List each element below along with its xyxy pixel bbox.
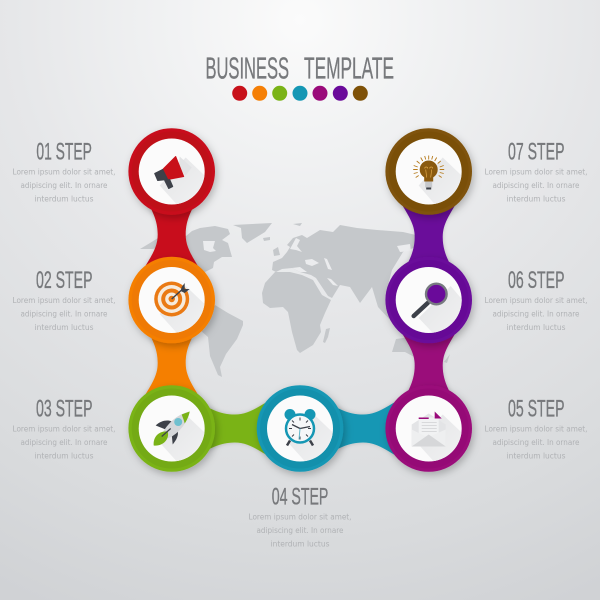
icon: target with arrow [154, 282, 190, 316]
text: 07 step: Lorem ipsum dolor sit amet, [484, 166, 588, 176]
text: 07 step: adipiscing elit. In ornare [492, 180, 580, 190]
icon: alarm clock [284, 409, 316, 446]
text: 03 step: adipiscing elit. In ornare [20, 437, 108, 447]
step 2: connector and orange disc [128, 257, 227, 404]
text: 07 step [484, 139, 588, 204]
colour dots legend [232, 86, 368, 101]
text: 05 step: adipiscing elit. In ornare [492, 437, 580, 447]
text: 04 step: 04 STEP [272, 484, 328, 510]
text: 06 step: Lorem ipsum dolor sit amet, [484, 295, 588, 305]
text: 06 step: interdum luctus [506, 322, 566, 332]
step 7: brown disc [385, 128, 484, 226]
text: 06 step [484, 267, 588, 332]
text: 06 step: adipiscing elit. In ornare [492, 308, 580, 318]
icon: envelope with letter [412, 412, 446, 446]
text: 02 step: interdum luctus [34, 322, 94, 332]
icon: rocket [154, 412, 190, 446]
map seas [203, 238, 411, 286]
title: TEMPLATE [304, 50, 394, 86]
text: 05 step: Lorem ipsum dolor sit amet, [484, 424, 588, 434]
icon: magnifying glass [414, 284, 447, 316]
title: BUSINESS [206, 50, 289, 86]
text: 02 step: adipiscing elit. In ornare [20, 308, 108, 318]
text: 01 step: interdum luctus [34, 194, 94, 204]
text: 02 step: 02 STEP [36, 267, 92, 294]
step 1: connector and red disc [128, 128, 227, 276]
text: 01 step: 01 STEP [36, 139, 92, 166]
step 3: connector and green disc [128, 385, 276, 484]
text: 01 step: Lorem ipsum dolor sit amet, [12, 166, 116, 176]
text: 05 step [484, 396, 588, 461]
text: 04 step: adipiscing elit. In ornare [256, 525, 344, 535]
text: 04 step [248, 484, 352, 548]
icon: megaphone [155, 156, 192, 188]
text: 01 step [12, 139, 116, 204]
world map [140, 223, 450, 377]
step 5: connector and magenta disc [384, 334, 478, 478]
text: 02 step [12, 267, 116, 332]
text: 03 step: Lorem ipsum dolor sit amet, [12, 424, 116, 434]
text: 03 step: 03 STEP [36, 396, 92, 422]
text: 04 step: Lorem ipsum dolor sit amet, [248, 511, 352, 521]
step 6: connector and purple disc [384, 205, 478, 349]
text: 03 step: interdum luctus [34, 451, 94, 461]
text: 05 step: interdum luctus [506, 451, 566, 461]
text: 03 step [12, 396, 116, 461]
step 4: connector and teal disc [257, 385, 404, 484]
icon: light bulb [413, 156, 444, 190]
text: 07 step: interdum luctus [506, 194, 566, 204]
text: 04 step: interdum luctus [270, 538, 330, 548]
text: 01 step: adipiscing elit. In ornare [20, 180, 108, 190]
text: 02 step: Lorem ipsum dolor sit amet, [12, 295, 116, 305]
